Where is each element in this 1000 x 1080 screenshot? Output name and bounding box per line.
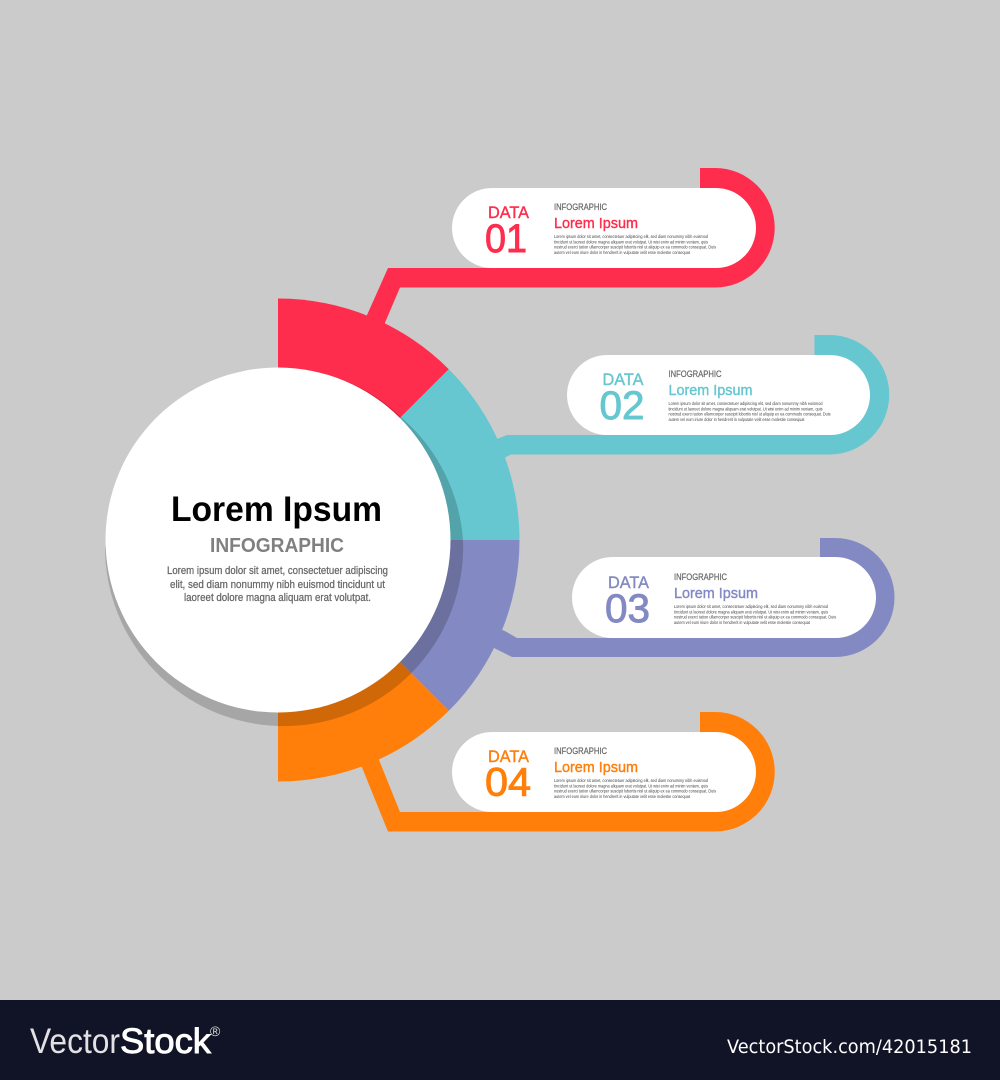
eyebrow 04: INFOGRAPHIC	[554, 746, 607, 756]
heading 04: Lorem Ipsum	[554, 760, 638, 776]
central white circle	[106, 368, 450, 712]
body text 01: Lorem ipsum dolor sit amet, consectetuer adipiscing elit, sed diam nonummy nibh euismod	[554, 234, 708, 239]
central paragraph: laoreet dolore magna aliquam erat volutpat.	[184, 592, 371, 604]
body text 01: nostrud exerci tation ullamcorper suscipit lobortis nisl ut aliquip ex ea commodo consequat. Duis	[554, 245, 717, 250]
connector band 1	[363, 168, 775, 332]
panel: data 02	[567, 355, 870, 435]
watermark logo: Stock: Stock	[120, 1022, 212, 1061]
body text 02: tincidunt ut laoreet dolore magna aliquam erat volutpat. Ut wisi enim ad minim veniam, quis	[668, 406, 823, 411]
eyebrow 01: INFOGRAPHIC	[554, 202, 607, 212]
eyebrow 03: INFOGRAPHIC	[674, 572, 727, 582]
body text 01	[554, 234, 717, 255]
body text 04: autem vel eum iriure dolor in hendrerit in vulputate velit esse molestie consequat	[554, 794, 691, 799]
heading 01: Lorem Ipsum	[554, 216, 638, 232]
panel: data 01	[452, 188, 756, 268]
body text 02: Lorem ipsum dolor sit amet, consectetuer adipiscing elit, sed diam nonummy nibh euismod	[668, 401, 823, 406]
body text 03: tincidunt ut laoreet dolore magna aliquam erat volutpat. Ut wisi enim ad minim veniam, quis	[674, 609, 829, 614]
central title: Lorem Ipsum	[171, 490, 382, 529]
pill 01	[452, 188, 756, 268]
ring segment: red	[278, 298, 449, 540]
body text 01: autem vel eum iriure dolor in hendrerit in vulputate velit esse molestie consequat	[554, 250, 691, 255]
central paragraph: Lorem ipsum dolor sit amet, consectetuer adipiscing	[167, 565, 388, 577]
registered mark: ®	[210, 1023, 221, 1039]
ring segment: purple	[278, 540, 520, 711]
body text 03: autem vel eum iriure dolor in hendrerit in vulputate velit esse molestie consequat	[674, 620, 811, 625]
central circle shadow	[105, 368, 463, 726]
ring segment: teal	[278, 369, 520, 540]
ring segment: orange	[278, 540, 449, 782]
panel: data 03	[572, 557, 876, 638]
label data 02: DATA	[602, 370, 644, 389]
body text 03: nostrud exerci tation ullamcorper suscipit lobortis nisl ut aliquip ex ea commodo consequat. Duis	[674, 615, 837, 620]
connector band 2	[480, 335, 889, 460]
panel: data 04	[452, 732, 756, 812]
body text 03: Lorem ipsum dolor sit amet, consectetuer adipiscing elit, sed diam nonummy nibh euismod	[674, 604, 828, 609]
body text 03	[674, 604, 837, 625]
body text 02: autem vel eum iriure dolor in hendrerit in vulputate velit esse molestie consequat	[668, 417, 805, 422]
body text 04	[554, 778, 717, 799]
central subtitle: INFOGRAPHIC	[210, 534, 344, 557]
eyebrow 02: INFOGRAPHIC	[668, 369, 722, 379]
connector band 4	[359, 712, 775, 832]
central text block	[167, 490, 388, 604]
number 03: 03	[605, 587, 650, 631]
body text 02: nostrud exerci tation ullamcorper suscipit lobortis nisl ut aliquip ex ea commodo consequat. Duis	[668, 412, 831, 417]
connector band 3	[480, 538, 895, 657]
body text 02	[668, 401, 831, 422]
central paragraph: elit, sed diam nonummy nibh euismod tincidunt ut	[170, 579, 385, 591]
body text 04: Lorem ipsum dolor sit amet, consectetuer adipiscing elit, sed diam nonummy nibh euismod	[554, 778, 708, 783]
label data 01: DATA	[488, 203, 530, 222]
footer bar	[0, 1000, 1000, 1080]
body text 01: tincidunt ut laoreet dolore magna aliquam erat volutpat. Ut wisi enim ad minim veniam, quis	[554, 239, 709, 244]
body text 04: nostrud exerci tation ullamcorper suscipit lobortis nisl ut aliquip ex ea commodo consequat. Duis	[554, 789, 717, 794]
label data 04: DATA	[488, 747, 530, 766]
central paragraph	[167, 565, 388, 604]
pill 04	[452, 732, 756, 812]
pill 03	[572, 557, 876, 638]
label data 03: DATA	[608, 573, 650, 592]
number 01: 01	[485, 217, 527, 261]
number 04: 04	[485, 760, 531, 804]
watermark logo: Vector: Vector	[30, 1022, 120, 1061]
number 02: 02	[600, 384, 644, 428]
body text 04: tincidunt ut laoreet dolore magna aliquam erat volutpat. Ut wisi enim ad minim veniam, quis	[554, 783, 709, 788]
pill 02	[567, 355, 870, 435]
heading 03: Lorem Ipsum	[674, 586, 758, 602]
heading 02: Lorem Ipsum	[668, 383, 752, 399]
watermark url: VectorStock.com/42015181	[727, 1036, 972, 1058]
ring segmented into four colours	[278, 298, 520, 782]
